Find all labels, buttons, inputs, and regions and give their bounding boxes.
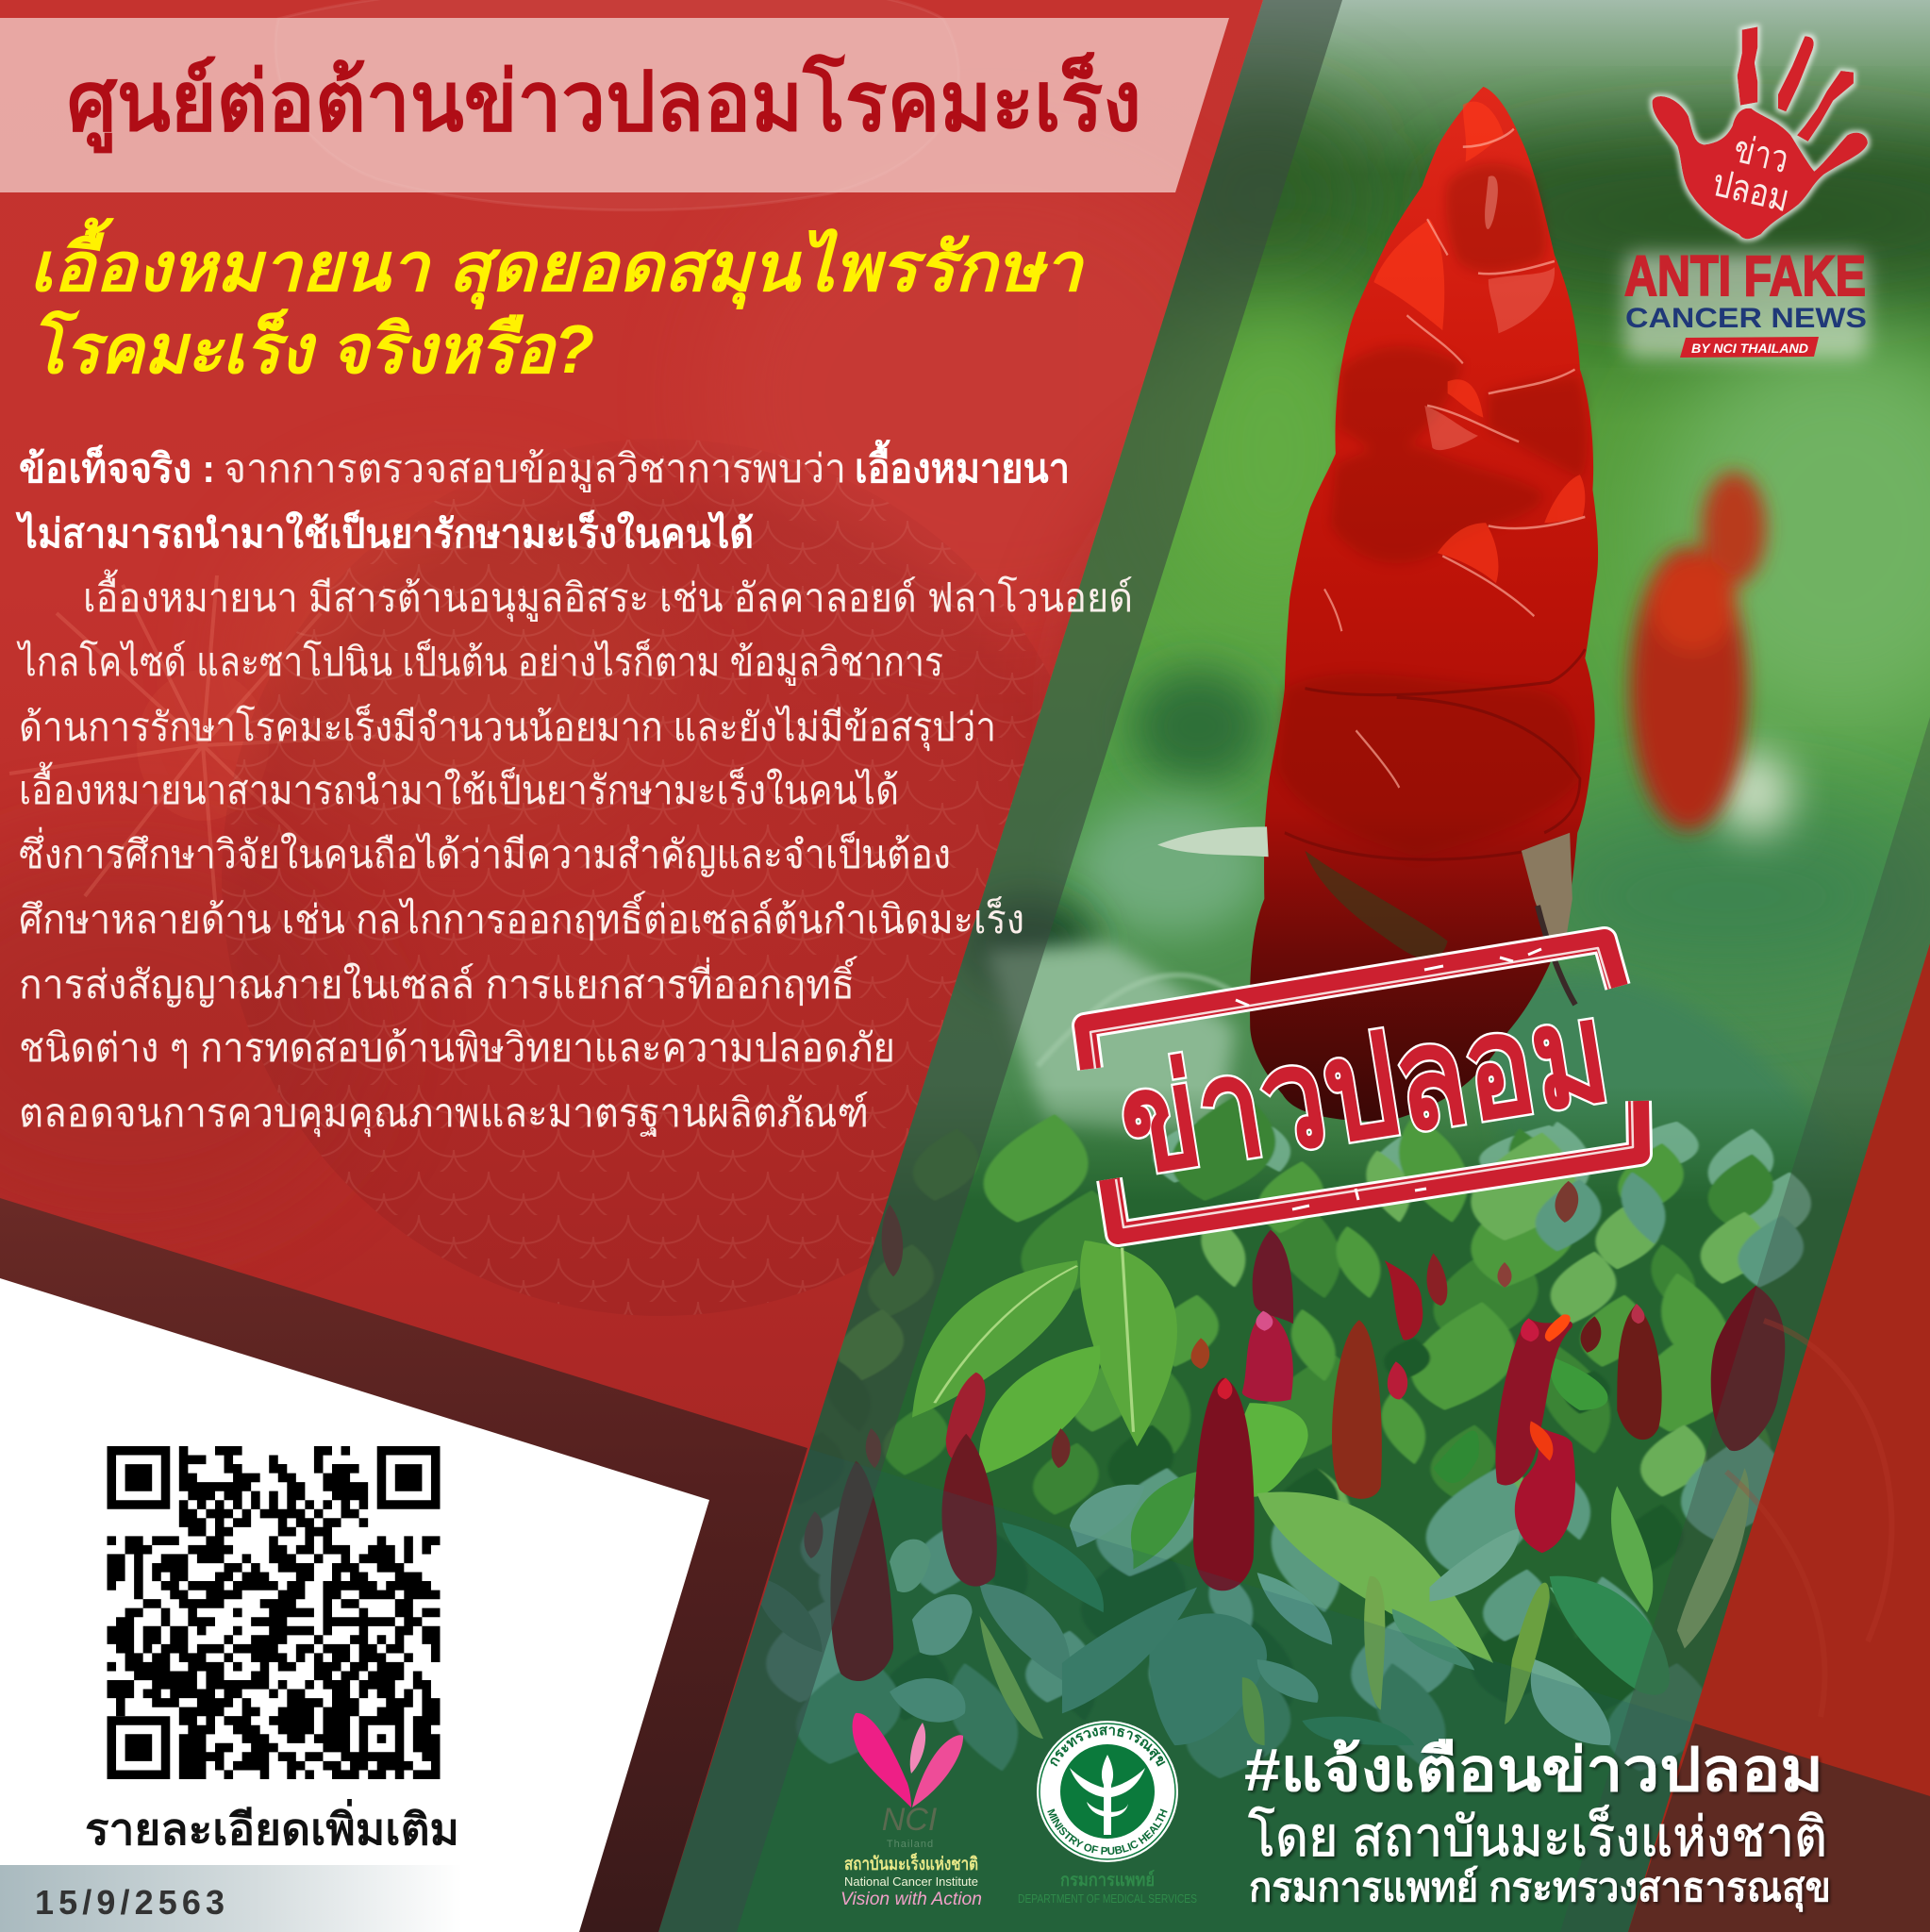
body text: ไม่สามารถนำมาใช้เป็นยารักษามะเร็งในคนได้ bbox=[15, 509, 754, 556]
logo: National Cancer Institute bbox=[840, 1713, 982, 1909]
logo: Anti Fake Cancer News bbox=[1624, 26, 1868, 358]
headline question: โรคมะเร็ง จริงหรือ? bbox=[29, 308, 594, 388]
date: 15/9/2563 bbox=[35, 1883, 225, 1922]
hand text: ข่าว bbox=[1730, 128, 1792, 181]
logo: Ministry of Public Health bbox=[1018, 1721, 1197, 1906]
lower teal leaves bbox=[755, 1468, 1749, 1745]
small leaves layer bbox=[766, 1092, 1811, 1778]
department Thai: กรมการแพทย์ bbox=[1060, 1870, 1155, 1890]
body text: ชนิดต่าง ๆ การทดสอบด้านพิษวิทยาและความปลอดภัย bbox=[19, 1025, 895, 1070]
seal text top: กระทรวงสาธารณสุข bbox=[1051, 1726, 1166, 1767]
QR code bbox=[108, 1446, 440, 1779]
stem curl bbox=[1538, 906, 1575, 1005]
logo halo bbox=[1624, 253, 1868, 358]
seal disc bbox=[1037, 1721, 1178, 1862]
body text: ไกลโคไซด์ และซาโปนิน เป็นต้น อย่างไรก็ตาม ข้อมูลวิชาการ bbox=[16, 639, 943, 686]
upper red cell bbox=[275, 0, 959, 210]
NCI Thai name: สถาบันมะเร็งแห่งชาติ bbox=[844, 1852, 978, 1874]
big green leaves bbox=[912, 1241, 1653, 1663]
CANCER NEWS: CANCER NEWS bbox=[1625, 303, 1867, 334]
main red flower bbox=[1157, 87, 1598, 1122]
BY NCI THAILAND tag bbox=[1680, 337, 1819, 358]
hand text: ปลอม bbox=[1708, 162, 1793, 220]
hand text bbox=[1708, 125, 1802, 220]
blurred second flowers bbox=[1630, 472, 1766, 830]
panel: red left background with cell imagery bbox=[0, 0, 1263, 1932]
body text: ข้อเท็จจริง : bbox=[19, 444, 215, 491]
stamp top bracket bbox=[1085, 940, 1618, 1069]
stamp bottom bracket bbox=[1109, 1101, 1639, 1234]
ANTI FAKE: ANTI FAKE bbox=[1624, 244, 1866, 308]
body text: ตลอดจนการควบคุมคุณภาพและมาตรฐานผลิตภัณฑ์ bbox=[19, 1091, 869, 1138]
body text: เอื้องหมายนาสามารถนำมาใช้เป็นยารักษามะเร็งในคนได้ bbox=[19, 761, 899, 812]
lower teal tint over photo bbox=[566, 1403, 1930, 1932]
icon: pink butterfly heart bbox=[853, 1713, 963, 1807]
stamp: fake news bbox=[1085, 940, 1639, 1234]
panel: white QR area bbox=[0, 1278, 709, 1932]
body text: เอื้องหมายนา มีสารต้านอนุมูลอิสระ เช่น อัลคาลอยด์ ฟลาโวนอยด์ bbox=[83, 569, 1133, 623]
NCI English name: National Cancer Institute bbox=[844, 1874, 978, 1889]
footer campaign text: โดย สถาบันมะเร็งแห่งชาติ bbox=[1248, 1805, 1827, 1868]
footer campaign text: #แจ้งเตือนข่าวปลอม bbox=[1244, 1736, 1823, 1804]
slogan: Vision with Action bbox=[840, 1890, 982, 1909]
maroon lower right bbox=[1628, 1724, 1930, 1932]
flower scale shadows bbox=[1277, 163, 1588, 857]
body text: ซึ่งการศึกษาวิจัยในคนถือได้ว่ามีความสำคัญและจำเป็นต้อง bbox=[19, 827, 951, 877]
body text: การส่งสัญญาณภายในเซลล์ การแยกสารที่ออกฤทธิ์ bbox=[19, 956, 857, 1008]
body text bbox=[15, 439, 1133, 1138]
icon: red hand bbox=[1653, 26, 1868, 239]
seal emblem bbox=[1070, 1755, 1145, 1835]
title: ศูนย์ต่อต้านข่าวปลอมโรคมะเร็ง bbox=[67, 51, 1141, 154]
Thailand label: Thailand bbox=[887, 1839, 934, 1850]
QR caption: รายละเอียดเพิ่มเติม bbox=[85, 1799, 459, 1854]
panel: dark maroon wedge bbox=[0, 1198, 807, 1932]
body text: ด้านการรักษาโรคมะเร็งมีจำนวนน้อยมาก และยังไม่มีข้อสรุปว่า bbox=[19, 704, 996, 752]
footer campaign text: กรมการแพทย์ กระทรวงสาธารณสุข bbox=[1249, 1865, 1831, 1912]
panel: red right triangle bbox=[1628, 943, 1930, 1932]
flower tips and highlights bbox=[1218, 1304, 1644, 1461]
headline question: เอื้องหมายนา สุดยอดสมุนไพรรักษา bbox=[29, 217, 1086, 309]
BY NCI THAILAND tag: BY NCI THAILAND bbox=[1691, 341, 1808, 356]
translucent strip over photo, left bbox=[658, 0, 1342, 1932]
translucent strip over photo, right bbox=[1560, 717, 1930, 1932]
body text: ศึกษาหลายด้าน เช่น กลไกการออกฤทธิ์ต่อเซลล์ต้นกำเนิดมะเร็ง bbox=[19, 891, 1024, 941]
foliage bbox=[559, 1085, 1930, 1932]
title band bbox=[0, 18, 1229, 192]
NCI script: NCI bbox=[882, 1802, 938, 1838]
photo: ginger flower background bbox=[559, 0, 1930, 1932]
headline question bbox=[29, 217, 1086, 388]
footer campaign text bbox=[1244, 1736, 1831, 1912]
spiky cell bbox=[9, 575, 396, 924]
red flower spikes bbox=[804, 1181, 1785, 1681]
large scaly tumour cell bbox=[222, 440, 1046, 1316]
department English: DEPARTMENT OF MEDICAL SERVICES bbox=[1018, 1891, 1197, 1906]
stamp text: ข่าวปลอม bbox=[1109, 971, 1619, 1205]
flower scale highlights bbox=[1373, 102, 1585, 583]
seal text bottom: MINISTRY OF PUBLIC HEALTH bbox=[1047, 1808, 1168, 1855]
body text: จากการตรวจสอบข้อมูลวิชาการพบว่า bbox=[224, 446, 846, 492]
body text: เอื้องหมายนา bbox=[855, 439, 1070, 491]
blurred background areas bbox=[962, 104, 1930, 1226]
date bar bbox=[0, 1865, 462, 1932]
